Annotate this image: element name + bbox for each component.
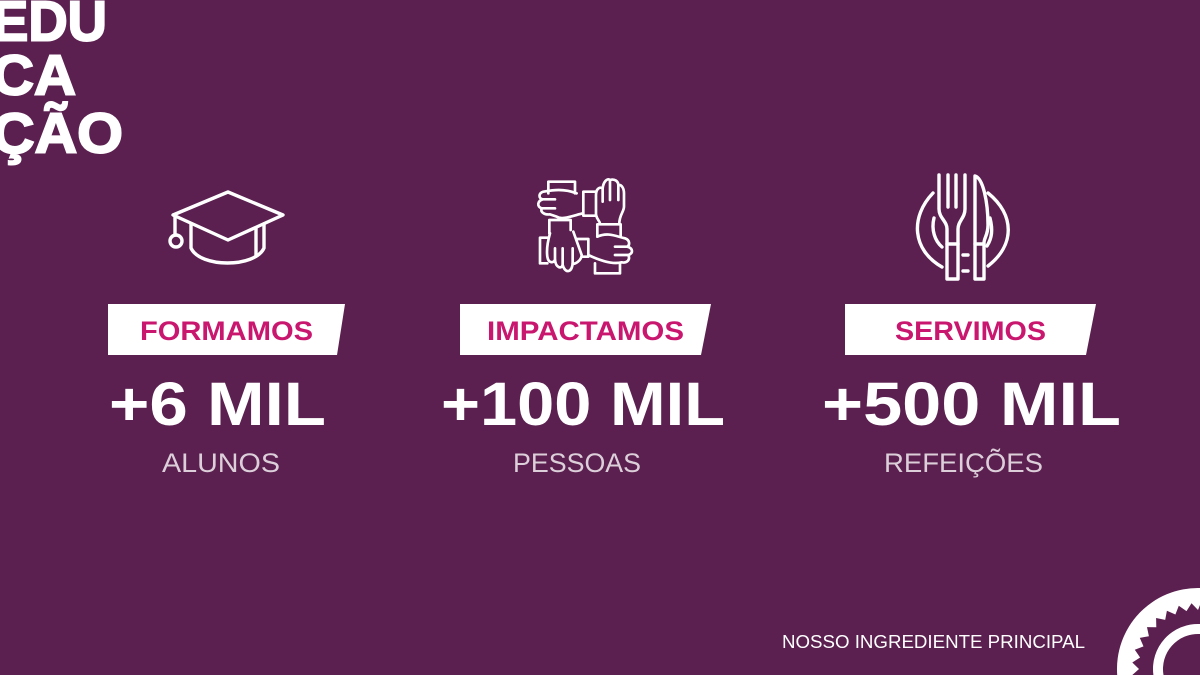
icon: gear logo <box>1117 588 1200 675</box>
banner: servimos: SERVIMOS <box>895 316 1046 346</box>
number: +500 mil: +500 MIL <box>822 370 1121 438</box>
footer tagline: NOSSO INGREDIENTE PRINCIPAL <box>782 632 1085 652</box>
title: EDUCAÇÃO <box>0 0 123 166</box>
banner: servimos <box>845 304 1096 355</box>
column: formamos <box>108 192 345 478</box>
label: pessoas: PESSOAS <box>513 448 641 478</box>
column: servimos <box>822 175 1121 478</box>
number: +6 mil: +6 MIL <box>109 370 326 438</box>
banner: formamos <box>108 304 345 355</box>
label: alunos: ALUNOS <box>162 448 280 478</box>
banner: impactamos: IMPACTAMOS <box>487 316 684 346</box>
number: +100 mil: +100 MIL <box>441 370 725 438</box>
label: refeições: REFEIÇÕES <box>884 447 1043 478</box>
icon: graduation cap <box>170 192 283 263</box>
icon: four joined hands <box>538 179 632 273</box>
banner: formamos: FORMAMOS <box>140 316 313 346</box>
column: impactamos <box>441 179 725 478</box>
banner: impactamos <box>460 304 711 355</box>
icon: plate with fork and knife <box>917 175 1008 279</box>
